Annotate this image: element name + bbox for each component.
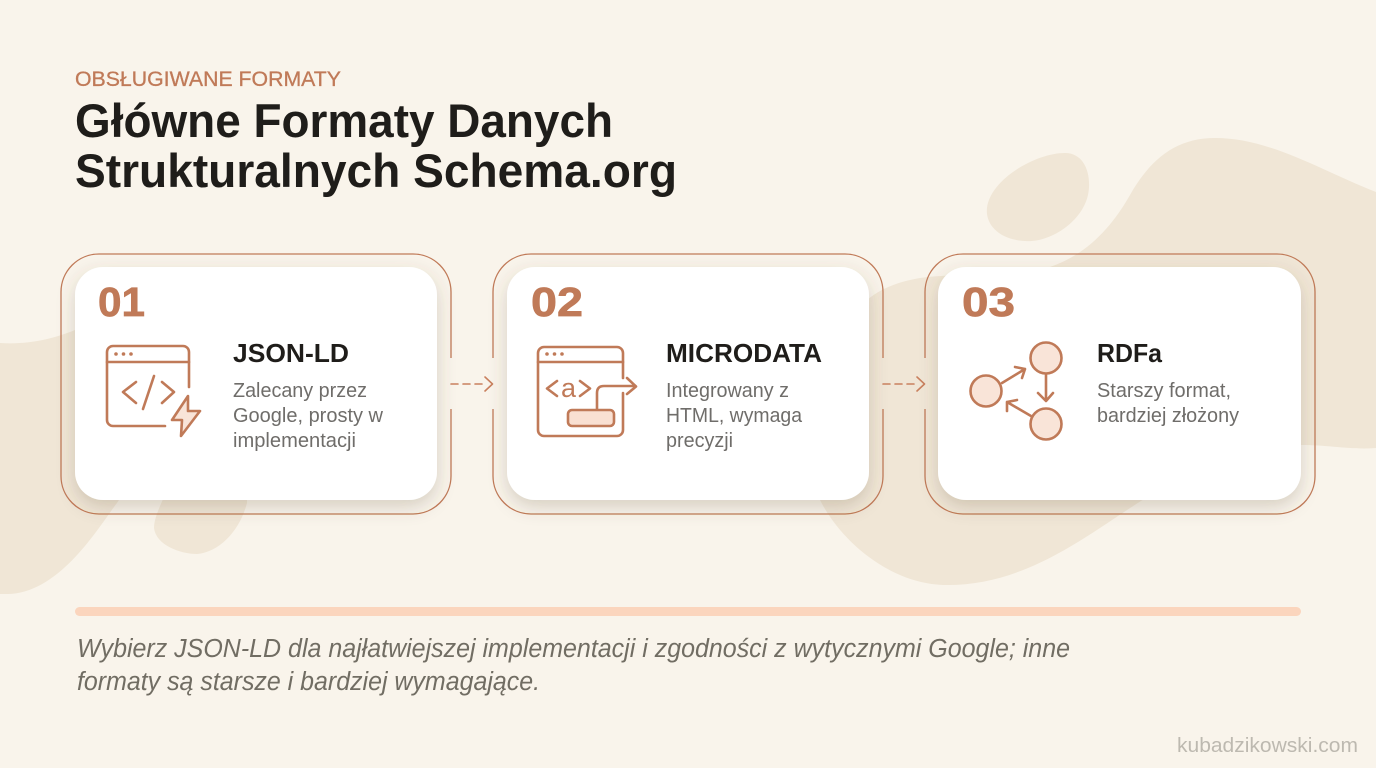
watermark: kubadzikowski.com — [1177, 735, 1358, 757]
icon: markup window with arrow — [538, 347, 636, 436]
description: precyzji — [666, 430, 733, 452]
title: Strukturalnych Schema.org — [75, 144, 677, 197]
panel: MICRODATA: 02 — [531, 279, 583, 325]
panel: MICRODATA — [493, 254, 883, 514]
arrow: 02 to 03 — [883, 377, 924, 391]
description: Starszy format, — [1097, 380, 1231, 402]
panel: JSON-LD: JSON-LD — [233, 338, 349, 368]
summary text: formaty są starsze i bardziej wymagające. — [77, 668, 540, 696]
eyebrow label: OBSŁUGIWANE FORMATY — [75, 68, 341, 91]
panel: RDFa: RDFa — [1097, 338, 1163, 368]
icon: code window with lightning bolt — [107, 346, 200, 436]
description: Google, prosty w — [233, 405, 384, 427]
description: implementacji — [233, 430, 356, 452]
panel: JSON-LD — [61, 254, 451, 514]
description: Zalecany przez — [233, 380, 367, 402]
title — [75, 94, 677, 197]
description — [666, 380, 803, 452]
summary text — [77, 635, 1070, 696]
description — [233, 380, 384, 452]
description — [1097, 380, 1239, 427]
description: Integrowany z — [666, 380, 789, 402]
panel: RDFa: 03 — [962, 279, 1015, 325]
panel: MICRODATA: a — [561, 373, 577, 403]
description: HTML, wymaga — [666, 405, 803, 427]
title: Główne Formaty Danych — [75, 94, 613, 147]
divider bar — [75, 607, 1301, 616]
background blobs — [0, 138, 1376, 594]
arrow: 01 to 02 — [451, 377, 492, 391]
panel: RDFa — [925, 254, 1315, 514]
panel: MICRODATA: MICRODATA — [666, 338, 822, 368]
description: bardziej złożony — [1097, 405, 1239, 427]
icon: linked nodes graph — [970, 342, 1062, 440]
summary text: Wybierz JSON-LD dla najłatwiejszej implementacji i zgodności z wytycznymi Google; inne — [77, 635, 1070, 663]
panel: JSON-LD: 01 — [98, 279, 145, 325]
